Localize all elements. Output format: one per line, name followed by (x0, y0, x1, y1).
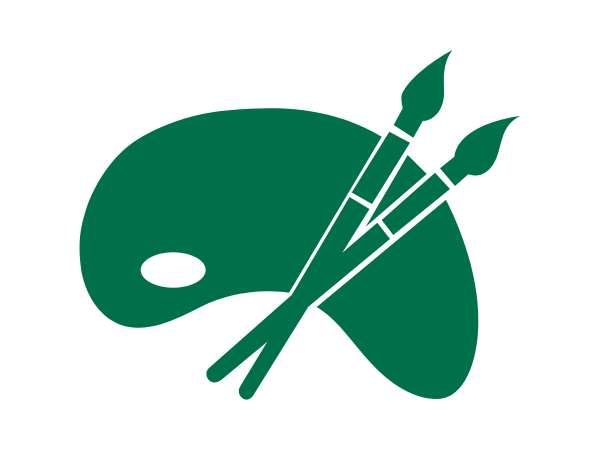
palette (80, 108, 478, 399)
brush one: back brush (352, 50, 452, 204)
gap behind brushes (289, 105, 475, 307)
palette thumb hole (141, 252, 206, 288)
brush two: front brush (382, 116, 520, 235)
crossed brush handles (206, 197, 390, 400)
palette wedge between brushes (366, 155, 427, 227)
